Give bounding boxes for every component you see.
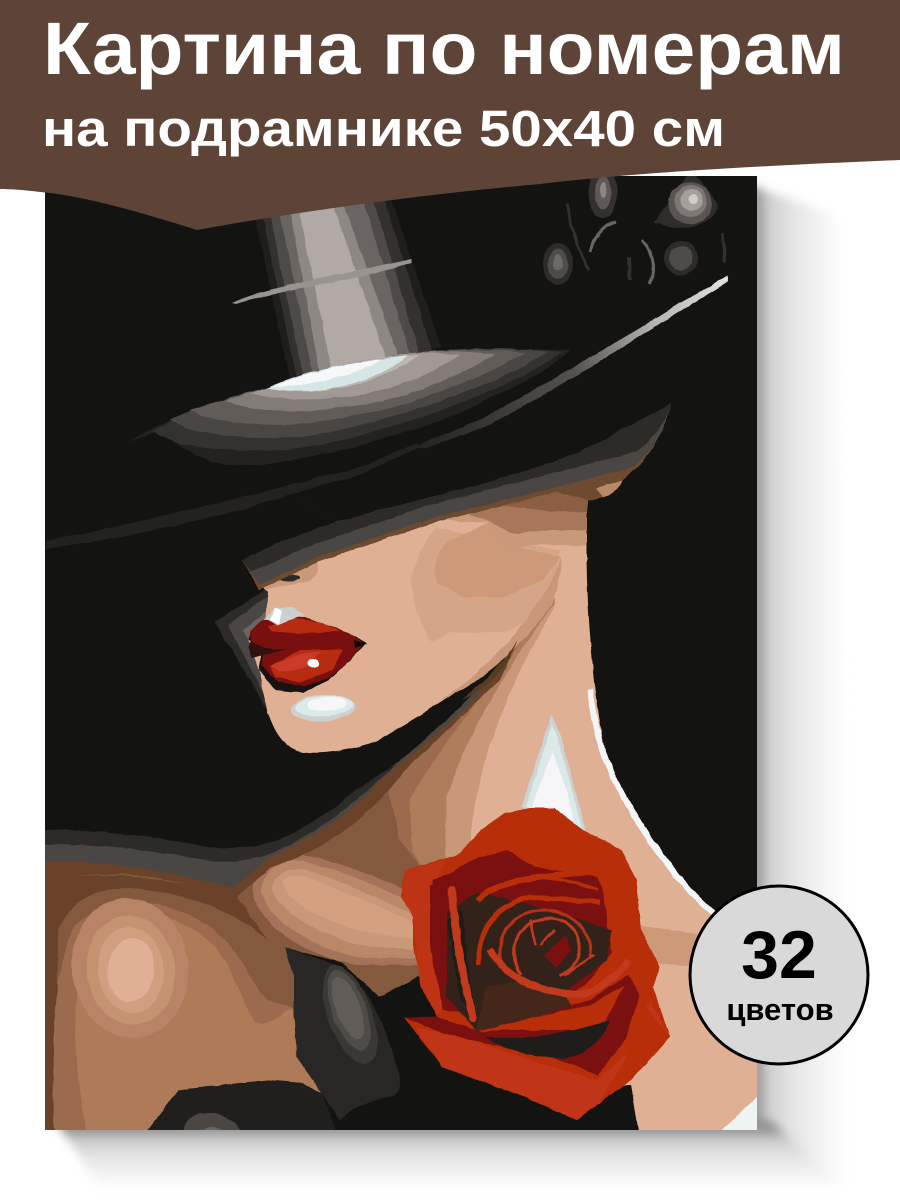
brown header banner [0,0,900,230]
rose dark centre [447,893,612,1030]
corner highlight [722,1097,757,1130]
hat flower decoration [543,165,725,285]
left face shadow [214,590,268,710]
hat strap [232,259,412,304]
rose [401,808,670,1120]
black glove [140,948,640,1140]
canvas drop shadow [55,185,850,1195]
shoulder left shading [45,875,320,1130]
hat underside shadow [242,403,671,590]
rose petal strokes [452,890,473,1018]
title line 1: Картина по номерам [43,7,845,90]
hat brim [128,348,570,465]
hat top crown [232,195,441,385]
chin highlight [291,694,356,722]
collarbone highlight [253,852,420,965]
neck white highlight [521,714,586,832]
rose lower petal [404,975,640,1075]
rose outer silhouette [401,808,670,1120]
title line 2: на подрамнике 50х40 см [42,100,725,157]
badge label: цветов [726,992,834,1027]
painting [30,165,770,1140]
lips [248,607,367,693]
badge: colour count [690,886,868,1064]
shadow under jaw and across shoulder [35,500,518,898]
neck shading [388,560,757,1130]
brim white highlight [267,355,407,391]
nostril [278,574,300,582]
badge number: 32 [741,917,817,993]
face [248,482,590,753]
neck rim light [588,688,716,915]
hat lower brim line [46,443,420,548]
hat edge highlight line [412,276,728,448]
body base skin [56,563,698,1008]
rose dark maroon heart [433,850,612,1030]
